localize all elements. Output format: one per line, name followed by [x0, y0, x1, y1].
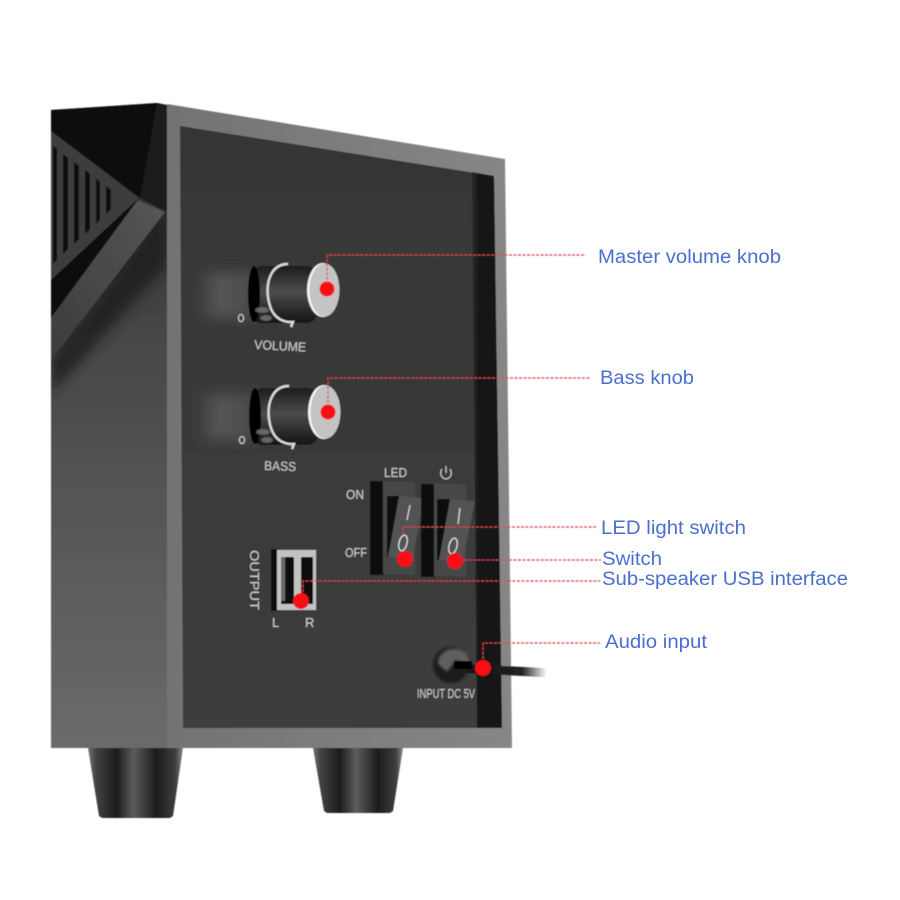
speaker photo	[51, 103, 601, 818]
speaker side face	[51, 103, 167, 748]
label: sub-speaker USB interface: Sub-speaker USB interface	[602, 569, 848, 590]
USB output port	[271, 549, 316, 611]
label: bass knob: Bass knob	[600, 368, 694, 389]
panel markings: knobs: BASS	[264, 458, 297, 474]
rear inner panel	[180, 126, 502, 728]
bass knob	[197, 385, 340, 449]
label: LED light switch: LED light switch	[601, 518, 746, 539]
label: master volume knob: Master volume knob	[598, 247, 781, 268]
switch labels: LED	[384, 465, 407, 480]
switch labels	[345, 465, 451, 560]
icon: power symbol	[441, 466, 451, 479]
rear frame	[167, 104, 512, 748]
speaker feet	[88, 748, 403, 818]
switch labels: OFF	[345, 545, 367, 560]
volume knob	[197, 263, 340, 327]
power rocker switch	[421, 483, 475, 577]
audio input plug and cable: INPUT DC 5V	[417, 686, 475, 701]
side vent slots	[53, 146, 111, 264]
USB labels	[247, 550, 314, 630]
panel markings: knobs	[238, 314, 307, 474]
red callout dots	[293, 282, 491, 676]
LED rocker switch	[370, 481, 424, 575]
USB labels: R	[305, 615, 314, 630]
switch labels: ON	[346, 487, 364, 502]
speaker rear panel infographic	[50, 102, 848, 819]
callout dashed leader lines	[303, 255, 601, 668]
USB labels: L	[272, 615, 279, 630]
panel markings: knobs: VOLUME	[254, 337, 307, 355]
USB labels: OUTPUT	[247, 550, 262, 610]
label: switch: Switch	[602, 549, 662, 570]
label: audio input: Audio input	[605, 632, 708, 653]
audio input plug and cable	[417, 647, 547, 701]
